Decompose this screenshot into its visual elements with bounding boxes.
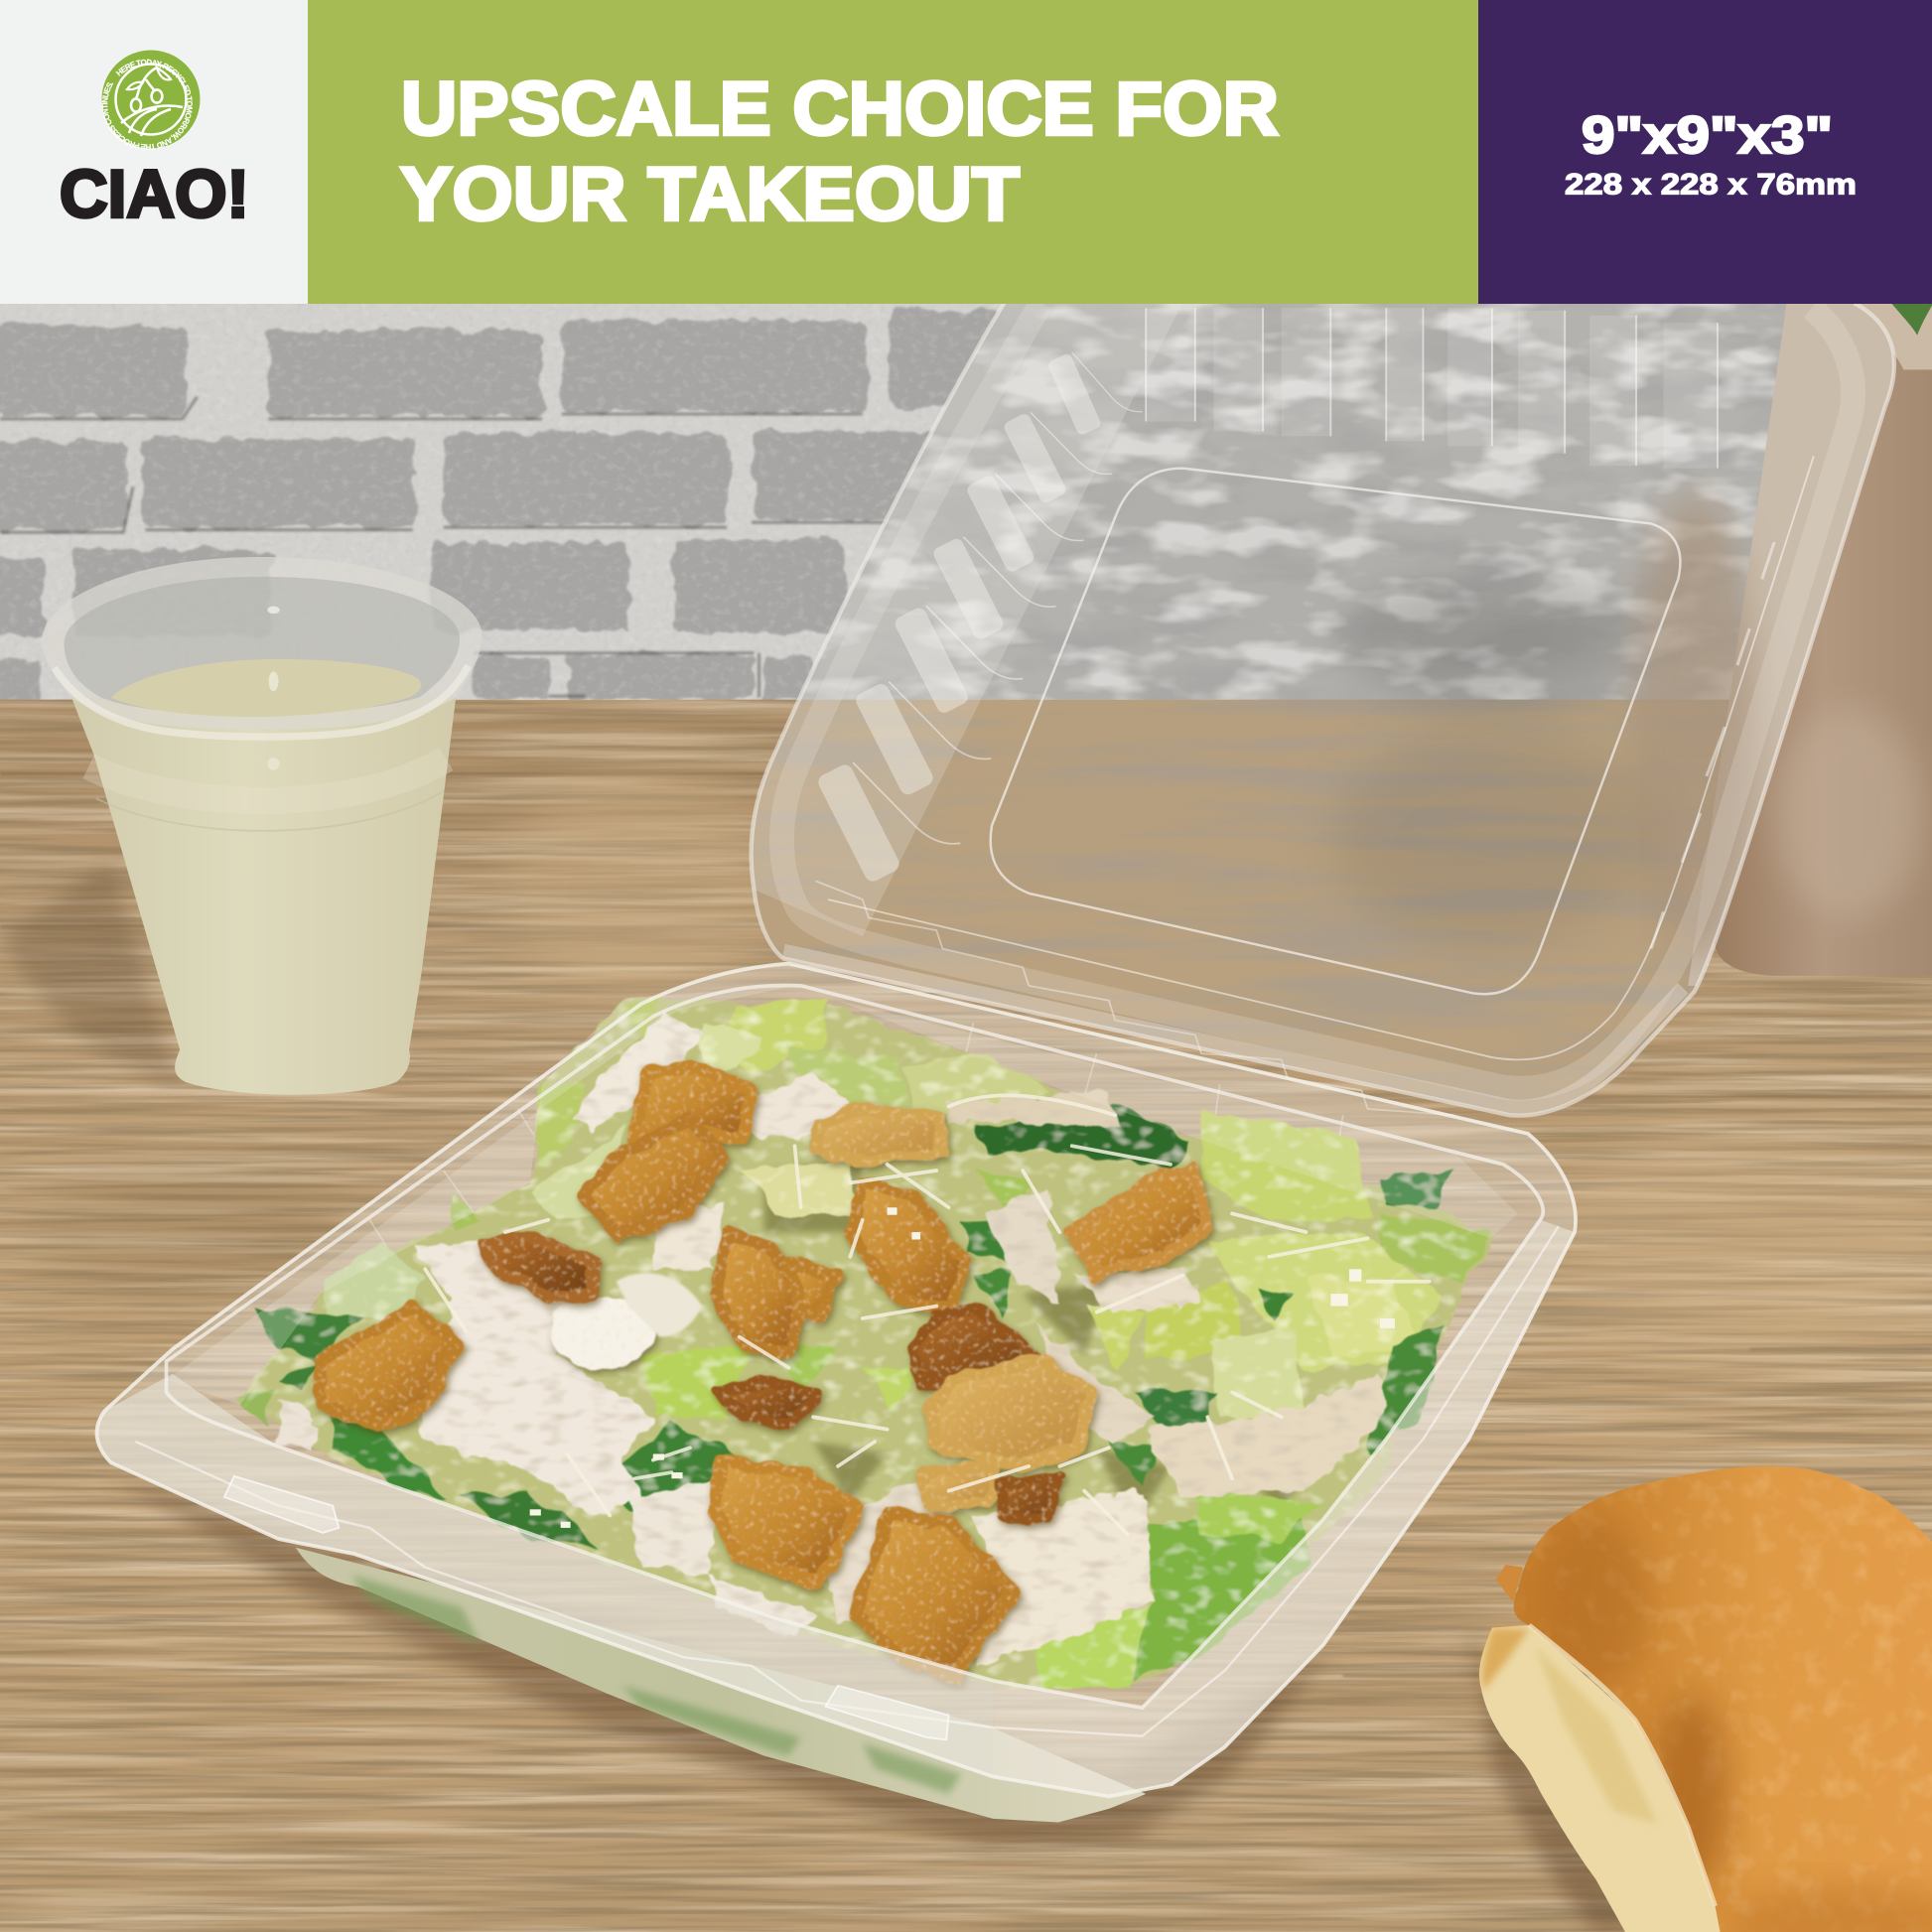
parmesan shreds bbox=[425, 1095, 1430, 1534]
icon: round recycling olive logo: HERE TODAY, RECYCLED TOMORROW, AND THE PROCESS CONTINUES. bbox=[101, 60, 193, 150]
plastic cup of lemonade bbox=[42, 557, 482, 1095]
dimensions in millimetres: 228 x 228 x 76mm bbox=[1565, 169, 1857, 201]
dimensions in inches: 9"x9"x3" bbox=[1582, 106, 1833, 165]
side clips on lid right bbox=[1651, 542, 1774, 949]
header: logo panel bbox=[0, 0, 308, 304]
dark romaine leaves bbox=[252, 1103, 1453, 1682]
header: dimensions panel bbox=[1478, 0, 1932, 304]
closure tab right bbox=[826, 1686, 949, 1739]
cheese flakes bbox=[530, 1207, 1395, 1528]
shaded gaps bbox=[763, 1159, 1307, 1528]
shadows on table bbox=[104, 1472, 1639, 1932]
lid left ribs bbox=[815, 335, 1143, 889]
lid flange band bbox=[781, 303, 1853, 1088]
open clamshell lid bbox=[740, 303, 1932, 1131]
lid inner rim bbox=[828, 456, 1814, 1059]
title bbox=[400, 68, 1279, 236]
container base tub seen through front wall bbox=[296, 1548, 1146, 1823]
title: YOUR TAKEOUT bbox=[400, 153, 1020, 236]
bread crust bbox=[1514, 1466, 1932, 1932]
golden croutons bbox=[318, 1066, 1207, 1678]
container front wall and rims bbox=[96, 964, 1576, 1796]
dinner roll bbox=[1479, 1460, 1932, 1932]
white breadcrumb crouton bbox=[553, 1296, 659, 1370]
bread crumb side bbox=[1479, 1625, 1725, 1932]
closure tab left bbox=[224, 1476, 339, 1533]
lid outer rim highlight bbox=[752, 303, 1894, 1116]
salad bed bbox=[240, 998, 1493, 1691]
wood table bbox=[0, 700, 1932, 1932]
front wall bbox=[96, 1374, 993, 1777]
right wall band bbox=[993, 1220, 1575, 1796]
container base body bbox=[96, 964, 1576, 1796]
see-through scene blurred by the lid bbox=[740, 303, 1932, 1131]
brick wall bbox=[0, 296, 1932, 702]
hinge edge notches bbox=[816, 881, 1453, 1115]
pale crumbs bbox=[617, 1273, 702, 1337]
rim lines bbox=[167, 985, 1543, 1708]
light romaine lettuce bbox=[234, 998, 1491, 1688]
side walls bbox=[167, 986, 794, 1405]
header: title panel bbox=[308, 0, 1478, 304]
clay pot bbox=[1715, 303, 1932, 976]
crust shading bbox=[1509, 1460, 1932, 1932]
caesar salad bbox=[234, 998, 1493, 1691]
brand wordmark: CIAO! bbox=[60, 157, 249, 232]
lid centre panel bbox=[991, 469, 1680, 994]
shredded chicken bbox=[277, 1011, 1386, 1670]
lid top ribs bbox=[1146, 308, 1718, 469]
title: UPSCALE CHOICE FOR bbox=[401, 68, 1279, 151]
